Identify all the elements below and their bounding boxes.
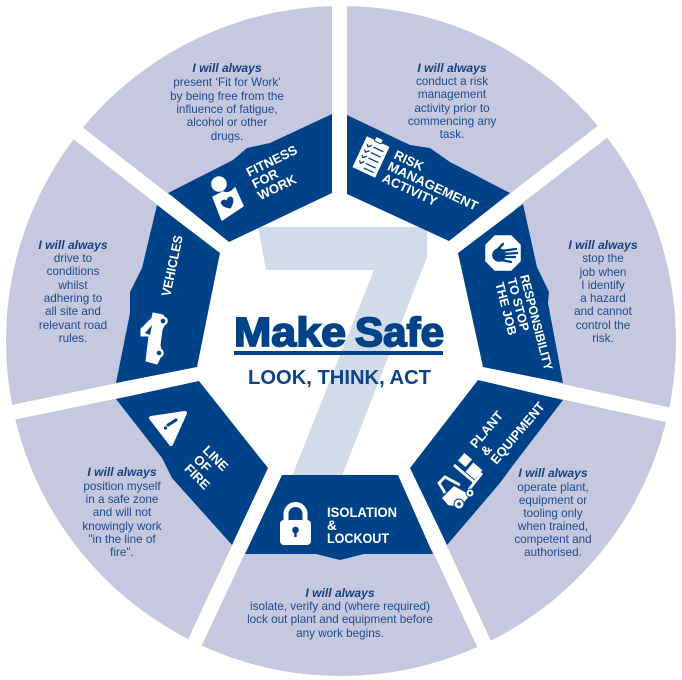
line of fire text block: "in the line of [88,533,156,546]
vehicles heading: VEHICLES [158,234,186,298]
vehicles text block: conditions [47,265,99,278]
plant heading: EQUIPMENT [487,399,548,467]
line of fire text block: I will always [87,465,157,479]
isolation text block: any work begins. [296,627,384,640]
vehicles text block: all site and [45,305,101,318]
fitness text block: by being free from the [170,90,284,103]
plant text block: equipment or [519,494,587,507]
icon: padlock [280,504,311,545]
plant text block: I will always [518,466,588,480]
plant text block: when trained, [517,520,588,533]
line of fire text block: knowingly work [82,520,162,533]
vehicles text block: relevant road [39,319,107,332]
plant band [410,380,563,545]
fitness band [168,114,332,242]
risk text block: conduct a risk [416,75,488,88]
vehicles text block: adhering to [44,292,103,305]
risk band [347,115,510,241]
isolation heading: & [327,518,337,533]
line of fire heading: OF [191,452,214,475]
risk text block: I will always [417,61,487,75]
line of fire text block: in a safe zone [86,493,158,506]
panel: fitness for work [168,61,332,242]
fitness heading: FITNESS [244,142,300,180]
icon: warning triangle [151,413,185,444]
responsibility text block: control the [576,319,630,332]
risk text block: task. [440,128,464,141]
vehicles text block: drive to [54,252,93,265]
center logo: Make Safe: Safe [355,309,444,355]
panel: plant and equipment [410,380,592,559]
center tagline: LOOK, THINK, ACT [248,366,431,389]
risk text block: management [418,88,487,101]
icon: forklift [439,453,482,509]
responsibility text block: and cannot [574,305,633,318]
line of fire band [116,381,268,545]
responsibility heading: TO STOP [505,277,532,333]
isolation text block: I will always [305,586,375,600]
responsibility text block: risk. [592,332,614,345]
icon: car [141,313,168,364]
isolation text block: lock out plant and equipment before [247,613,433,626]
plant text block: authorised. [524,546,582,559]
risk heading: RISK [392,147,427,174]
center logo: Make Safe: Make [234,309,346,355]
fitness text block: drugs. [211,130,243,143]
icon: clipboard [352,133,391,178]
fitness text block: alcohol or other [187,116,267,129]
line of fire text block: and will not [93,506,152,519]
plant text block: operate plant, [517,481,589,494]
icon: person with heart [211,176,243,220]
panel: risk management activity [347,61,510,241]
panel: isolation and lockout [245,475,433,640]
responsibility band [458,204,563,383]
fitness text block: influence of fatigue, [176,103,278,116]
risk heading: MANAGEMENT [385,158,481,214]
panel: vehicles [38,205,220,383]
vehicles band [116,205,220,383]
risk text block: commencing any [408,115,496,128]
vehicles text block: whilst [57,279,88,292]
plant text block: competent and [514,533,592,546]
fitness heading: FOR [249,166,281,191]
fitness text block: present ‘Fit for Work’ [173,76,281,89]
fitness text block: I will always [192,61,262,75]
center logo: Make Safe [234,309,444,355]
risk text block: activity prior to [414,102,490,115]
responsibility text block: job when [579,266,626,279]
isolation heading: LOCKOUT [327,531,390,546]
panel: responsibility to stop the job [458,204,638,383]
isolation heading: ISOLATION [327,505,397,520]
icon: stop hand [486,236,520,270]
line of fire heading: FIRE [181,461,213,493]
plant text block: tooling only [523,507,583,520]
responsibility text block: a hazard [580,292,626,305]
responsibility heading: THE JOB [492,281,519,337]
panel: line of fire [82,381,268,559]
line of fire text block: position myself [83,480,161,493]
responsibility heading: RESPONSIBILITY [517,273,555,372]
responsibility text block: I identify [581,279,625,292]
vehicles text block: I will always [38,238,108,252]
line of fire text block: fire". [110,546,134,559]
isolation text block: isolate, verify and (where required) [250,600,430,613]
plant heading: PLANT [467,408,506,451]
plant heading: & [477,442,495,459]
fitness heading: WORK [255,171,299,203]
line of fire heading: LINE [200,443,232,474]
responsibility text block: stop the [582,252,624,265]
responsibility text block: I will always [568,238,638,252]
risk heading: ACTIVITY [380,170,440,209]
isolation band [245,475,433,560]
big background numeral 7 [258,227,427,476]
vehicles text block: rules. [59,332,87,345]
